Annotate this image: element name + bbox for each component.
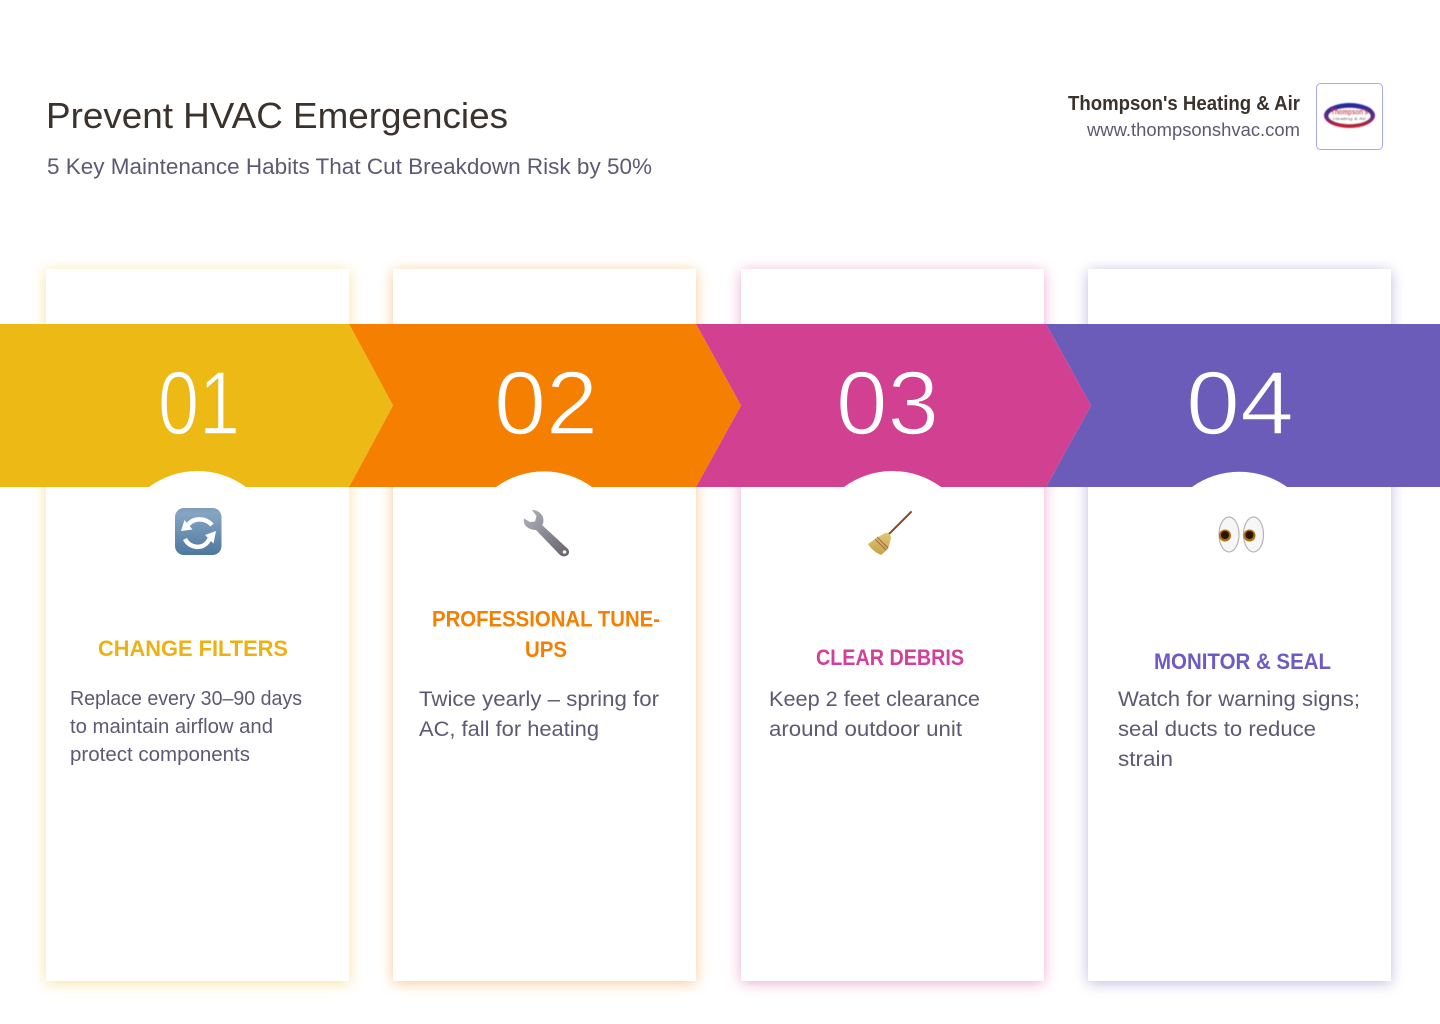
icon: eyes <box>1219 517 1264 552</box>
panel: change filters: protect components <box>70 744 250 766</box>
icon circle tabs <box>149 471 1287 487</box>
panel: monitor and seal: MONITOR & SEAL <box>1154 649 1331 674</box>
company logo <box>1316 84 1382 150</box>
panel: professional tune-ups: UPS <box>525 637 567 662</box>
icon: broom <box>868 512 911 555</box>
arrow band: step 04: 04 <box>1186 354 1294 454</box>
arrow band: step 01 <box>0 324 393 487</box>
panel: monitor and seal: seal ducts to reduce <box>1118 718 1316 741</box>
arrow band: step 03: 03 <box>836 354 939 454</box>
panel: change filters: CHANGE FILTERS <box>98 636 288 661</box>
arrow band: step 04 <box>1046 324 1440 487</box>
panel: monitor and seal <box>1088 269 1391 983</box>
arrow band: step 01: 01 <box>158 354 240 454</box>
panel: clear debris: CLEAR DEBRIS <box>816 645 964 670</box>
subtitle: 5 Key Maintenance Habits That Cut Breakdown Risk by 50% <box>47 154 652 179</box>
company logo: Thompson's <box>1331 108 1368 116</box>
arrow band: step 03 <box>696 324 1091 487</box>
panel: professional tune-ups: AC, fall for heating <box>419 718 599 741</box>
panel: professional tune-ups <box>393 269 696 983</box>
panel: clear debris: Keep 2 feet clearance <box>769 688 980 711</box>
title: Prevent HVAC Emergencies <box>46 95 508 136</box>
panel: monitor and seal: Watch for warning signs; <box>1118 688 1360 711</box>
panel: clear debris: around outdoor unit <box>769 718 962 741</box>
panel: professional tune-ups: PROFESSIONAL TUNE- <box>432 606 660 632</box>
icon: wrench <box>524 510 569 556</box>
panel: change filters: to maintain airflow and <box>70 716 273 738</box>
company name: Thompson's Heating & Air <box>1068 93 1300 115</box>
arrow band: step 02: 02 <box>494 354 598 454</box>
panel: change filters <box>46 269 349 983</box>
icon: arrows in blue tile <box>175 508 222 555</box>
panel: monitor and seal: strain <box>1118 748 1173 771</box>
company logo: Heating & Air <box>1333 116 1367 121</box>
panel: clear debris <box>741 269 1044 983</box>
panel: professional tune-ups: Twice yearly – spring for <box>419 688 659 711</box>
company website: www.thompsonshvac.com <box>1086 119 1300 140</box>
panel: change filters: Replace every 30–90 days <box>70 688 302 710</box>
arrow band: step 02 <box>349 324 741 487</box>
